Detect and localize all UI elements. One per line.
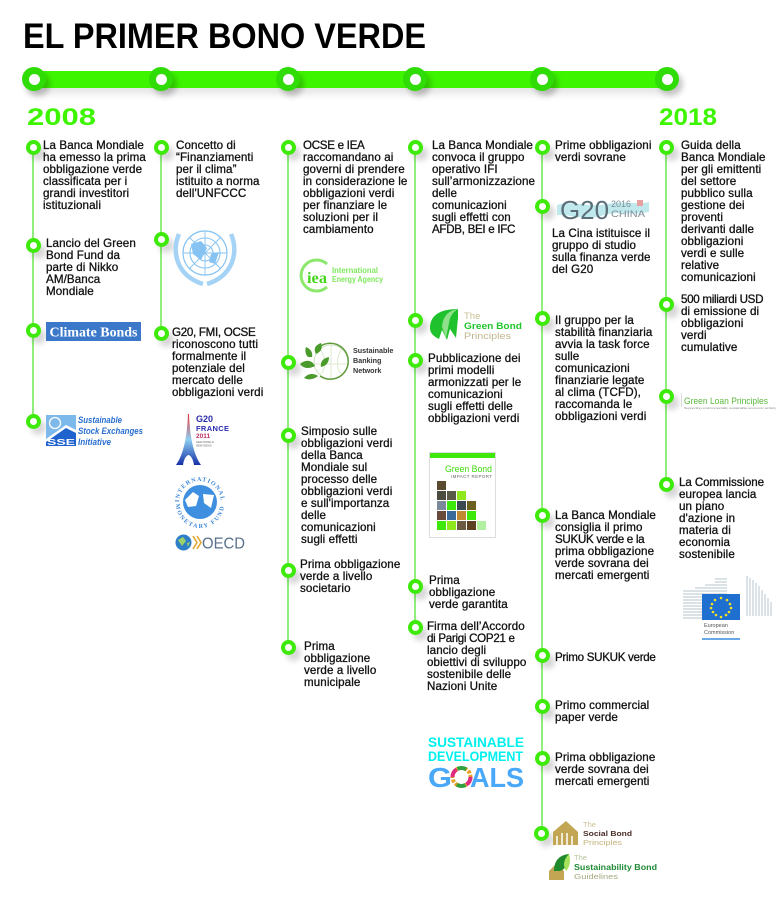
text: harmonised templates (428, 352, 521, 425)
text: European Commission plan: materia di (679, 524, 731, 537)
logo: Sustainable Stock Exchanges Initiative: Stock Exchanges (78, 426, 143, 437)
logo: Sustainable Development Goals: DEVELOPMENT (428, 748, 523, 764)
text: first corporate bond: societario (300, 582, 351, 595)
text: G20 study group: La Cina istituisce il (552, 227, 650, 240)
text: IFI working group: operativo IFI (432, 163, 498, 176)
text: World Bank guide: comunicazioni (681, 271, 756, 284)
text: Paris Agreement: di Parigi COP21 e (427, 632, 515, 645)
text: IFI working group: La Banca Mondiale (432, 139, 533, 152)
text: OECD IEA: governi di prendere (303, 163, 405, 176)
logo: Sustainable Banking Network: Network (353, 366, 381, 375)
logo: Green Bond Impact Report: IMPACT REPORT (451, 474, 492, 479)
text: first green SUKUK: Primo SUKUK verde (555, 651, 656, 664)
text: World Bank guide: Guida della (681, 139, 741, 152)
text: first sovereign bonds: Prime obbligazioni (555, 139, 652, 152)
text: first commercial paper: paper verde (555, 711, 618, 724)
text: green bond fund: Lancio del Green (46, 237, 136, 250)
text: first corporate bond: verde a livello (300, 570, 372, 583)
text: European Commission plan (679, 477, 764, 561)
logo: G20 France 2011: NEW IDEAS (196, 444, 212, 448)
text: climate finance: Concetto di (176, 139, 236, 152)
text: first sovereign bonds (554, 139, 652, 164)
main timeline bar (22, 67, 686, 99)
text: Paris Agreement (427, 620, 526, 693)
text: G20 IMF OECD (172, 326, 263, 399)
text: OECD IEA: obbligazioni verdi (303, 187, 394, 200)
text: World Bank guide: verdi e sulle (681, 247, 744, 260)
logo: IEA: International (332, 265, 378, 275)
text: first green bond: classificata per i (43, 175, 127, 188)
text: Paris Agreement: lancio degli (427, 644, 486, 657)
text: IFI working group: sull’armonizzazione (432, 175, 535, 188)
text: climate finance: “Finanziamenti (176, 151, 253, 164)
logo: European Commission: European (704, 623, 728, 629)
text: World Bank guide: proventi (681, 211, 723, 224)
text: 500 billion USD: cumulative (681, 341, 737, 354)
text: harmonised templates: Pubblicazione dei (428, 352, 521, 365)
logo: G20 France 2011: FRANCE (196, 424, 229, 433)
text: IFI working group: delle (432, 187, 457, 200)
text: OECD IEA: soluzioni per il (303, 211, 378, 224)
year 2008: 2008 (27, 104, 96, 131)
text: G20 IMF OECD: mercato delle (172, 374, 243, 387)
text: World Bank symposium: obbligazioni verdi (301, 485, 392, 498)
text: World Bank symposium: e sull'importanza (301, 497, 389, 510)
logo: Social Bond Principles: The (583, 820, 596, 829)
logo: G20 2016 China (557, 195, 649, 225)
column 5 (534, 139, 657, 881)
logo: Sustainable Stock Exchanges Initiative (46, 415, 143, 448)
text: World Bank symposium (301, 425, 392, 546)
text: World Bank symposium: sugli effetti (301, 533, 358, 546)
text: 500 billion USD: obbligazioni (681, 317, 743, 330)
text: guaranteed bond (428, 574, 508, 611)
text: OECD IEA: per finanziare le (303, 199, 387, 212)
text: climate finance: istituito a norma (176, 175, 260, 188)
text: World Bank guide: derivanti dalle (681, 223, 754, 236)
text: green SUKUK advice: verde sovrana dei (555, 557, 649, 570)
text: Paris Agreement: obiettivi di sviluppo (427, 656, 526, 669)
text: European Commission plan: un piano (679, 500, 724, 513)
text: European Commission plan: sostenibile (679, 548, 735, 561)
text: first green bond: obbligazione verde (43, 163, 142, 176)
text: World Bank symposium: Mondiale sul (301, 461, 367, 474)
text: guaranteed bond: obbligazione (429, 586, 495, 599)
logo: Sustainable Stock Exchanges Initiative: Initiative (78, 437, 112, 448)
logo: International Monetary Fund: INTERNATIONAL (175, 477, 225, 502)
text: IFI working group: AFDB, BEI e IFC (432, 223, 515, 236)
text: TCFD: al clima (TCFD), (555, 386, 641, 399)
text: G20 study group (552, 227, 651, 276)
text: green SUKUK advice: SUKUK verde e la (555, 533, 644, 546)
logo: Sustainability Bond Guidelines (549, 853, 661, 881)
text: first municipal bond: municipale (304, 676, 360, 689)
text: OECD IEA: cambiamento (303, 223, 374, 236)
logo: Sustainability Bond Guidelines: Guidelines (574, 872, 618, 881)
text: first corporate bond: Prima obbligazione (300, 558, 400, 571)
text: OECD IEA: in considerazione le (303, 175, 407, 188)
text: TCFD: obbligazioni verdi (555, 410, 646, 423)
text: European Commission plan: La Commissione (679, 476, 764, 489)
logo: Sustainable Development Goals: ALS (470, 762, 524, 793)
text: TCFD: Il gruppo per la (555, 314, 634, 327)
text: first green bond: grandi investitori (43, 187, 129, 200)
text: TCFD: comunicazioni (555, 362, 630, 375)
logo: Sustainable Stock Exchanges Initiative: Sustainable (78, 415, 123, 426)
text: 500 billion USD: di emissione di (681, 305, 759, 318)
logo: G20 2016 China: CHINA (611, 209, 645, 219)
text: harmonised templates: sugli effetti delle (428, 400, 513, 413)
text: harmonised templates: primi modelli (428, 364, 494, 377)
text: climate finance: dell'UNFCCC (176, 187, 246, 200)
text: TCFD: finanziarie legate (555, 374, 644, 387)
logo: Green Bond Principles: Green Bond (464, 321, 522, 332)
text: first emerging sovereign bond: Prima obbligazione (555, 751, 655, 764)
text: European Commission plan: europea lancia (679, 488, 756, 501)
text: first green bond: La Banca Mondiale (43, 139, 144, 152)
logo: United Nations (173, 230, 236, 286)
logo: IEA (300, 258, 383, 292)
column 1 (26, 139, 146, 448)
text: G20 IMF OECD: formalmente il (172, 350, 246, 363)
text: first commercial paper (555, 699, 649, 724)
text: OECD IEA: OCSE e IEA (303, 139, 364, 152)
text: G20 study group: del G20 (552, 263, 593, 276)
text: World Bank guide: gestione dei (681, 199, 745, 212)
logo: Sustainability Bond Guidelines: Sustainability Bond (574, 863, 657, 872)
text: World Bank guide: pubblico sulla (681, 187, 753, 200)
text: green bond fund: AM/Banca (46, 273, 100, 286)
text: G20 IMF OECD: obbligazioni verdi (172, 386, 263, 399)
text: World Bank guide (681, 140, 766, 284)
text: green SUKUK advice: La Banca Mondiale (555, 509, 656, 522)
logo: G20 2016 China: G20 (560, 195, 609, 225)
text: first green bond: ha emesso la prima (43, 151, 146, 164)
text: first emerging sovereign bond (554, 751, 655, 788)
logo: Social Bond Principles (553, 820, 635, 846)
text: harmonised templates: armonizzati per le (428, 376, 521, 389)
logo: Social Bond Principles: Principles (583, 838, 622, 847)
column 3 (281, 139, 407, 689)
text: green SUKUK advice: prima obbligazione (555, 545, 654, 558)
text: climate finance (176, 139, 260, 200)
text: climate finance: per il clima” (176, 163, 237, 176)
logo: European Commission: Commission (704, 630, 734, 636)
text: World Bank symposium: obbligazioni verdi (301, 437, 392, 450)
text: first municipal bond (304, 640, 376, 689)
text: TCFD: avvia la task force (555, 338, 650, 351)
text: first green bond: istituzionali (43, 199, 101, 212)
text: IFI working group: sugli effetti con (432, 211, 511, 224)
text: World Bank guide: Banca Mondiale (681, 151, 766, 164)
logo: International Monetary Fund: MONETARY FUND (176, 504, 224, 528)
text: green bond fund (46, 237, 136, 298)
logo: European Commission (683, 576, 777, 642)
text: TCFD: stabilità finanziaria (555, 326, 652, 339)
logo: Sustainable Banking Network: Sustainable (353, 346, 393, 355)
logo: Green Bond Principles: Principles (464, 331, 511, 342)
text: Paris Agreement: Firma dell’Accordo (427, 620, 525, 633)
text: first emerging sovereign bond: mercati emergenti (555, 775, 649, 788)
text: 500 billion USD: 500 miliardi USD (681, 293, 763, 306)
text: IFI working group (432, 139, 535, 236)
text: G20 study group: sulla finanza verde (552, 251, 651, 264)
text: first sovereign bonds: verdi sovrane (555, 151, 626, 164)
column 6 (657, 0, 780, 650)
logo: G20 France 2011: 2011 (196, 433, 210, 440)
text: first municipal bond: verde a livello (304, 664, 376, 677)
text: first municipal bond: Prima (304, 640, 335, 653)
text: World Bank symposium: Simposio sulle (301, 425, 377, 438)
logo: Sustainable Banking Network (300, 342, 394, 380)
logo: Green Loan Principles: Green Loan Principles (684, 396, 768, 407)
text: IFI working group: comunicazioni (432, 199, 507, 212)
column 2 (154, 139, 263, 552)
text: green SUKUK advice: consiglia il primo (555, 521, 642, 534)
text: first commercial paper: Primo commercial (555, 699, 649, 712)
logo: Social Bond Principles: Social Bond (583, 829, 632, 838)
column 4 (408, 139, 535, 793)
logo: Green Loan Principles: Supporting environmentally sustainable economic activity (684, 406, 777, 410)
logo: G20 2016 China: 2016 (611, 199, 631, 209)
text: green SUKUK advice: mercati emergenti (555, 569, 649, 582)
text: green SUKUK advice (554, 509, 656, 582)
text: guaranteed bond: Prima (429, 574, 460, 587)
text: G20 IMF OECD: riconoscono tutti (172, 338, 258, 351)
logo: IEA: Energy Agency (332, 274, 383, 284)
text: harmonised templates: comunicazioni (428, 388, 503, 401)
logo: Sustainable Development Goals: SUSTAINABLE (428, 734, 524, 750)
text: green bond fund: Mondiale (46, 285, 94, 298)
text: OECD IEA (303, 139, 407, 236)
logo: Sustainable Development Goals: G (428, 762, 452, 793)
logo: Green Bond Principles: The (464, 311, 480, 322)
logo: International Monetary Fund (175, 477, 225, 528)
logo: Climate Bonds: Climate Bonds (50, 326, 138, 340)
year 2018: 2018 (659, 104, 717, 131)
text: European Commission plan: economia (679, 536, 730, 549)
text: OECD IEA: raccomandano ai (303, 151, 393, 164)
text: Paris Agreement: Nazioni Unite (427, 680, 497, 693)
text: World Bank symposium: processo delle (301, 473, 377, 486)
text: World Bank symposium: della Banca (301, 449, 363, 462)
text: World Bank guide: obbligazioni (681, 235, 743, 248)
text: G20 IMF OECD: potenziale del (172, 362, 245, 375)
text: first emerging sovereign bond: verde sovrana dei (555, 763, 649, 776)
text: World Bank guide: del settore (681, 175, 736, 188)
logo: G20 France 2011: NEW WORLD (196, 440, 214, 444)
text: green bond fund: Bond Fund da (46, 249, 120, 262)
text: G20 IMF OECD: G20, FMI, OCSE (172, 326, 255, 339)
logo: Green Loan Principles (681, 393, 777, 413)
text: World Bank guide: relative (681, 259, 719, 272)
text: first corporate bond (300, 558, 400, 595)
text: 500 billion USD: verdi (681, 329, 707, 342)
text: harmonised templates: obbligazioni verdi (428, 412, 519, 425)
text: IFI working group: convoca il gruppo (432, 151, 525, 164)
text: first municipal bond: obbligazione (304, 652, 370, 665)
text: TCFD: raccomanda le (555, 398, 632, 411)
logo: Green Bond Impact Report: Green Bond (445, 464, 492, 475)
logo: OECD (176, 534, 245, 552)
logo: Sustainable Banking Network: Banking (353, 356, 381, 365)
logo: Sustainable Development Goals (428, 734, 524, 793)
text: Paris Agreement: sostenibile delle (427, 668, 511, 681)
logo: Sustainability Bond Guidelines: The (574, 853, 587, 862)
text: first green bond (43, 139, 146, 212)
text: green bond fund: parte di Nikko (46, 261, 118, 274)
logo: Green Bond Impact Report (429, 452, 496, 538)
logo: OECD: OECD (202, 536, 245, 552)
logo: G20 France 2011 (176, 414, 229, 465)
title: EL PRIMER BONO VERDE (23, 17, 426, 56)
text: European Commission plan: d'azione in (679, 512, 735, 525)
text: G20 study group: gruppo di studio (552, 239, 636, 252)
text: TCFD (555, 314, 652, 423)
text: World Bank symposium: delle (301, 509, 326, 522)
text: guaranteed bond: verde garantita (429, 598, 508, 611)
text: TCFD: sulle (555, 350, 579, 363)
text: World Bank symposium: comunicazioni (301, 521, 376, 534)
logo: G20 France 2011: G20 (196, 414, 213, 424)
logo: IEA: iea (307, 270, 327, 287)
logo: Green Bond Principles (430, 309, 522, 342)
text: 500 billion USD (681, 294, 763, 354)
logo: Sustainable Stock Exchanges Initiative: SSE (47, 437, 76, 447)
text: World Bank guide: per gli emittenti (681, 163, 761, 176)
